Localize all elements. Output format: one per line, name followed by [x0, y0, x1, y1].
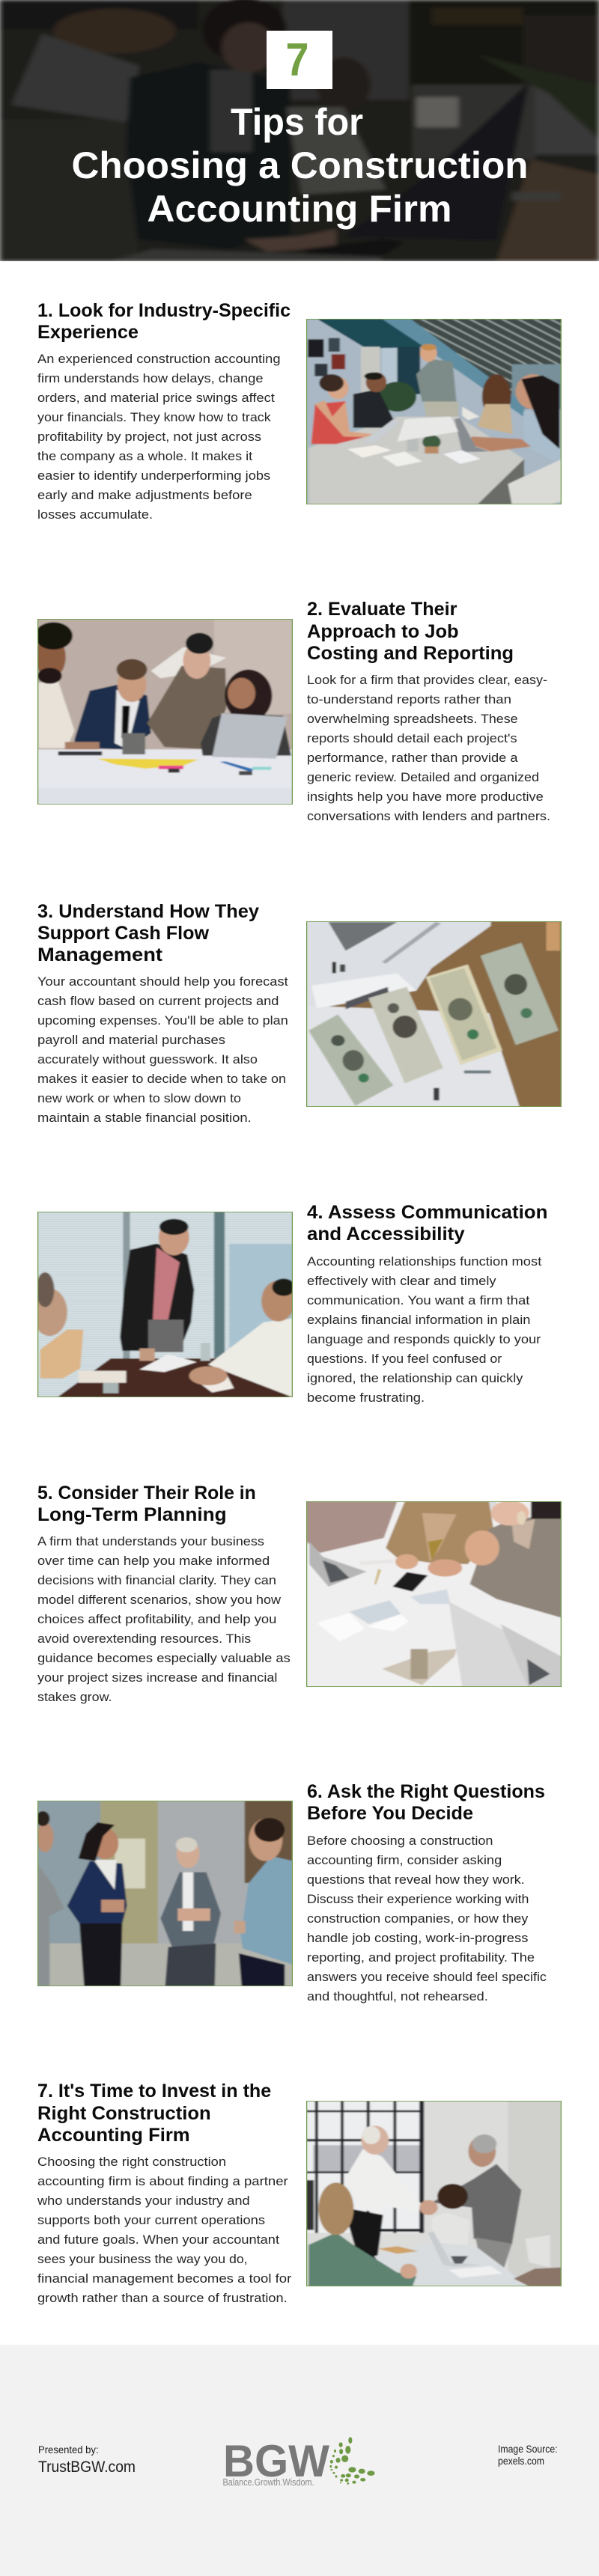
panel: tip 4 [32, 1202, 547, 1405]
text block: tip 6: reporting, and project profitability. The [307, 1950, 535, 1965]
heading: tip 3: Support Cash Flow [37, 923, 210, 944]
text block: tip 2: overwhelming spreadsheets. These [307, 712, 518, 726]
panel: hero header [0, 0, 599, 261]
heading: tip 6: Before You Decide [307, 1803, 473, 1824]
text block: tip 7: and future goals. When your accountant [37, 2232, 279, 2247]
text block: tip 3: payroll and material purchases [37, 1033, 225, 1047]
heading: tip 4: and Accessibility [307, 1224, 465, 1245]
text block: tip 1: profitability by project, not just across [37, 430, 261, 444]
text block: tip 1: early and make adjustments before [37, 488, 252, 502]
text block: tip 7: who understands your industry and [37, 2194, 250, 2208]
presented by: TrustBGW.com [38, 2459, 136, 2476]
text block: tip 4: effectively with clear and timely [307, 1274, 496, 1288]
text block: tip 2: performance, rather than provide a [307, 751, 518, 765]
text block: tip 2: generic review. Detailed and organized [307, 770, 539, 784]
text block: tip 3: makes it easier to decide when to take on [37, 1072, 286, 1086]
heading: tip 7: Accounting Firm [37, 2125, 190, 2146]
panel: footer [0, 2345, 599, 2576]
text block: tip 1: the company as a whole. It makes it [37, 449, 252, 463]
heading: tip 1: 1. Look for Industry-Specific [37, 300, 291, 321]
heading: tip 2 [307, 599, 514, 664]
title: Tips for [231, 101, 363, 143]
title [72, 101, 529, 230]
number badge: 7 [286, 34, 308, 86]
text block: tip 5: decisions with financial clarity. They can [37, 1573, 276, 1587]
text block: tip 5: over time can help you make informed [37, 1554, 270, 1568]
text block: tip 6 [307, 1834, 547, 2003]
text block: tip 7 [37, 2155, 292, 2305]
heading: tip 6 [307, 1781, 545, 1824]
presented by: Presented by: [38, 2444, 99, 2456]
text block: tip 6: answers you receive should feel specific [307, 1970, 547, 1984]
text block: tip 6: Before choosing a construction [307, 1834, 493, 1848]
text block: tip 1 [37, 352, 280, 522]
text block: tip 4: Accounting relationships function most [307, 1254, 542, 1269]
heading: tip 1: Experience [37, 322, 139, 343]
panel: tip 3 [37, 901, 562, 1125]
text block: tip 1: An experienced construction accounting [37, 352, 280, 366]
text block: tip 3: maintain a stable financial position. [37, 1111, 252, 1125]
text block: tip 4: ignored, the relationship can quickly [307, 1371, 523, 1385]
text block: tip 3: cash flow based on current projects and [37, 994, 279, 1008]
text block: tip 7: financial management becomes a tool for [37, 2271, 292, 2286]
heading: tip 1 [37, 300, 291, 343]
text block: tip 7: growth rather than a source of frustration. [37, 2291, 288, 2305]
text block: tip 4: become frustrating. [307, 1391, 425, 1405]
heading: tip 2: 2. Evaluate Their [307, 599, 457, 620]
heading: tip 3: Management [37, 944, 163, 965]
heading: tip 4: 4. Assess Communication [307, 1202, 547, 1223]
number badge [267, 31, 332, 89]
heading: tip 5: Long-Term Planning [37, 1504, 227, 1525]
text block: tip 2: conversations with lenders and partners. [307, 809, 550, 823]
photo: dollar bills on reports [306, 921, 562, 1107]
presented by [38, 2444, 136, 2476]
text block: tip 5: your project sizes increase and financial [37, 1670, 277, 1685]
panel: tip 6 [36, 1781, 547, 2003]
logo: BGW: Balance.Growth.Wisdom. [223, 2477, 314, 2488]
heading: tip 7: Right Construction [37, 2103, 211, 2124]
heading: tip 7 [37, 2081, 271, 2146]
photo: manager at meeting table [32, 1212, 295, 1397]
heading: tip 6: 6. Ask the Right Questions [307, 1781, 545, 1802]
photo: two women with papers and laptops [306, 1501, 562, 1687]
text block: tip 3: new work or when to slow down to [37, 1091, 241, 1105]
panel: tip 2 [34, 599, 550, 823]
text block: tip 4: communication. You want a firm that [307, 1293, 530, 1307]
text block: tip 7: supports both your current operations [37, 2213, 265, 2227]
heading: tip 7: 7. It's Time to Invest in the [37, 2081, 271, 2102]
heading: tip 5: 5. Consider Their Role in [37, 1483, 256, 1504]
photo: four colleagues talking [36, 1801, 293, 1986]
text block: tip 6: and thoughtful, not rehearsed. [307, 1989, 488, 2003]
text block: tip 3: accurately without guesswork. It also [37, 1052, 258, 1066]
text block: tip 1: easier to identify underperforming jobs [37, 468, 270, 483]
text block: tip 6: construction companies, or how they [307, 1911, 529, 1926]
text block: tip 5: choices affect profitability, and help you [37, 1612, 276, 1626]
image source [498, 2443, 558, 2467]
hero background photo [0, 0, 599, 261]
text block: tip 6: Discuss their experience working with [307, 1892, 529, 1906]
text block: tip 2: insights help you have more productive [307, 790, 544, 804]
heading: tip 5 [37, 1483, 256, 1525]
title: Accounting Firm [147, 188, 452, 230]
text block: tip 3 [37, 974, 288, 1125]
text block: tip 1: losses accumulate. [37, 507, 153, 522]
heading: tip 3: 3. Understand How They [37, 901, 259, 922]
heading: tip 2: Approach to Job [307, 621, 459, 642]
text block: tip 6: questions that reveal how they work. [307, 1873, 525, 1887]
heading: tip 2: Costing and Reporting [307, 643, 514, 664]
logo: BGW: BGW [223, 2436, 329, 2486]
text block: tip 3: Your accountant should help you forecast [37, 974, 288, 989]
panel: tip 1 [37, 300, 562, 522]
text block: tip 4: explains financial information in plain [307, 1313, 530, 1327]
text block: tip 6: handle job costing, work-in-progress [307, 1931, 528, 1945]
heading: tip 3 [37, 901, 259, 965]
text block: tip 4: questions. If you feel confused or [307, 1352, 502, 1366]
text block: tip 4 [307, 1254, 542, 1405]
icon: green dotted leaf [329, 2437, 375, 2485]
photo: colleagues reviewing at desk [34, 619, 293, 805]
text block: tip 5 [37, 1534, 291, 1704]
text block: tip 3: upcoming expenses. You'll be able to plan [37, 1013, 288, 1028]
title: Choosing a Construction [72, 144, 529, 186]
panel: tip 7 [37, 2081, 562, 2305]
heading: tip 4 [307, 1202, 547, 1245]
image source: Image Source: [498, 2443, 558, 2455]
text block: tip 6: accounting firm, consider asking [307, 1853, 502, 1867]
text block: tip 5: avoid overextending resources. This [37, 1632, 251, 1646]
photo: handshake in bright office [306, 2101, 562, 2286]
photo: team meeting at table [306, 319, 562, 504]
text block: tip 2 [307, 673, 550, 823]
image source: pexels.com [498, 2455, 544, 2467]
text block: tip 1: firm understands how delays, change [37, 371, 264, 385]
text block: tip 5: guidance becomes especially valuable as [37, 1651, 291, 1665]
text block: tip 2: to-understand reports rather than [307, 692, 511, 706]
text block: tip 5: A firm that understands your business [37, 1534, 264, 1548]
text block: tip 4: language and responds quickly to your [307, 1332, 541, 1346]
text block: tip 7: accounting firm is about finding a partner [37, 2174, 288, 2188]
text block: tip 7: sees your business the way you do, [37, 2252, 248, 2266]
text block: tip 1: orders, and material price swings affect [37, 391, 275, 405]
text block: tip 5: model different scenarios, show you how [37, 1593, 282, 1607]
text block: tip 1: your financials. They know how to track [37, 410, 271, 424]
text block: tip 7: Choosing the right construction [37, 2155, 226, 2169]
text block: tip 5: stakes grow. [37, 1690, 112, 1704]
text block: tip 2: reports should detail each project's [307, 731, 517, 745]
text block: tip 2: Look for a firm that provides clear, easy- [307, 673, 547, 687]
panel: tip 5 [37, 1483, 562, 1704]
